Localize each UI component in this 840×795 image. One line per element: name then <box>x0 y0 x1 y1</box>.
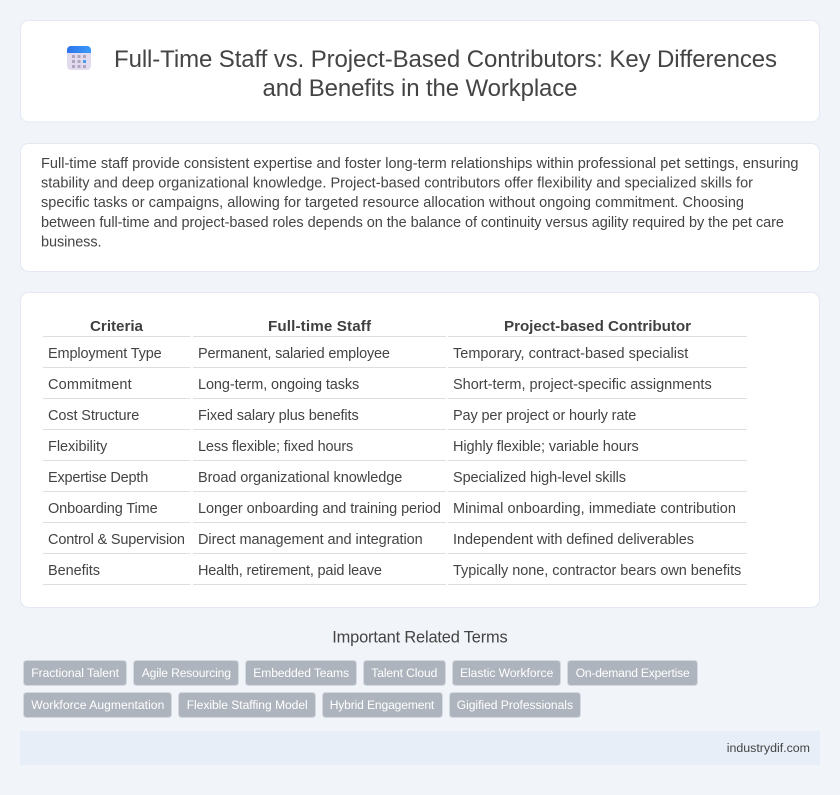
tag <box>246 660 356 686</box>
row: Benefits: Health, retirement, paid leave <box>198 563 382 579</box>
row: Cost Structure <box>43 408 747 430</box>
row: Control & Supervision: Control & Supervision <box>48 532 185 548</box>
row: Commitment: Long-term, ongoing tasks <box>198 377 359 393</box>
tag <box>452 660 560 686</box>
row: Expertise Depth: Specialized high-level skills <box>453 470 626 486</box>
row: Flexibility: Highly flexible; variable hours <box>453 439 639 455</box>
row: Flexibility: Flexibility <box>48 439 108 455</box>
row: Flexibility: Less flexible; fixed hours <box>198 439 353 455</box>
table header: Project-based Contributor <box>504 318 691 335</box>
row: Commitment: Commitment <box>48 377 132 393</box>
tag: Embedded Teams <box>253 666 349 680</box>
row: Expertise Depth: Expertise Depth <box>48 470 148 486</box>
row: Benefits <box>43 563 747 585</box>
tag: Flexible Staffing Model <box>187 698 308 712</box>
panel: description <box>20 144 820 272</box>
tag <box>450 692 580 718</box>
row: Cost Structure: Fixed salary plus benefits <box>198 408 359 424</box>
row: Commitment <box>43 377 747 399</box>
panel: comparison table <box>20 292 820 608</box>
tag <box>24 660 126 686</box>
panel: header <box>20 20 820 122</box>
tag: Workforce Augmentation <box>31 698 164 712</box>
text block: description: business. <box>41 234 102 250</box>
row: Employment Type: Permanent, salaried employee <box>198 346 390 362</box>
title: and Benefits in the Workplace <box>262 75 578 102</box>
row: Employment Type <box>43 346 747 368</box>
tag: Fractional Talent <box>31 666 120 680</box>
row: Expertise Depth: Broad organizational knowledge <box>198 470 402 486</box>
text block: description <box>41 156 798 250</box>
table header <box>43 318 747 337</box>
row: Employment Type: Temporary, contract-based specialist <box>453 346 688 362</box>
row: Cost Structure: Cost Structure <box>48 408 139 424</box>
tag: On-demand Expertise <box>576 666 690 680</box>
text block: description: Full-time staff provide consistent expertise and foster long-term relationships within professional pet settings, ensuring <box>41 156 798 172</box>
row: Onboarding Time: Onboarding Time <box>48 501 158 517</box>
text block: description: specific tasks or campaigns, allowing for targeted resource allocation without ongoing commitment. Choosing <box>41 195 744 211</box>
row: Expertise Depth <box>43 470 747 492</box>
row: Benefits: Benefits <box>48 563 100 579</box>
footer <box>20 731 820 765</box>
tags: related terms <box>24 660 698 718</box>
tag <box>568 660 698 686</box>
row: Benefits: Typically none, contractor bears own benefits <box>453 563 741 579</box>
title: Full-Time Staff vs. Project-Based Contributors: Key Differences <box>114 46 777 73</box>
table header: Full-time Staff <box>268 318 372 335</box>
title <box>114 46 777 102</box>
tag <box>24 692 172 718</box>
icon: calendar <box>67 46 91 70</box>
tag <box>322 692 442 718</box>
tag: Elastic Workforce <box>460 666 554 680</box>
row: Flexibility <box>43 439 747 461</box>
heading: related terms: Important Related Terms <box>332 629 508 647</box>
tag: Agile Resourcing <box>142 666 231 680</box>
tag: Talent Cloud <box>371 666 437 680</box>
row: Onboarding Time: Longer onboarding and training period <box>198 501 441 517</box>
text block: description: stability and deep organizational knowledge. Project-based contributors offer flexibility and specialized skills for <box>41 176 753 192</box>
tag <box>178 692 316 718</box>
row: Cost Structure: Pay per project or hourly rate <box>453 408 636 424</box>
text block: description: between full-time and project-based roles depends on the balance of continuity versus agility required by the pet care <box>41 215 784 231</box>
tag: Gigified Professionals <box>457 698 573 712</box>
footer: industrydif.com <box>727 741 810 755</box>
tag <box>364 660 446 686</box>
table header: Criteria <box>90 318 144 335</box>
row: Commitment: Short-term, project-specific assignments <box>453 377 712 393</box>
row: Onboarding Time <box>43 501 747 523</box>
tag <box>134 660 238 686</box>
row: Onboarding Time: Minimal onboarding, immediate contribution <box>453 501 736 517</box>
row: Control & Supervision: Direct management and integration <box>198 532 423 548</box>
row: Employment Type: Employment Type <box>48 346 162 362</box>
row: Control & Supervision: Independent with defined deliverables <box>453 532 694 548</box>
row: Control & Supervision <box>43 532 747 554</box>
tag: Hybrid Engagement <box>330 698 435 712</box>
